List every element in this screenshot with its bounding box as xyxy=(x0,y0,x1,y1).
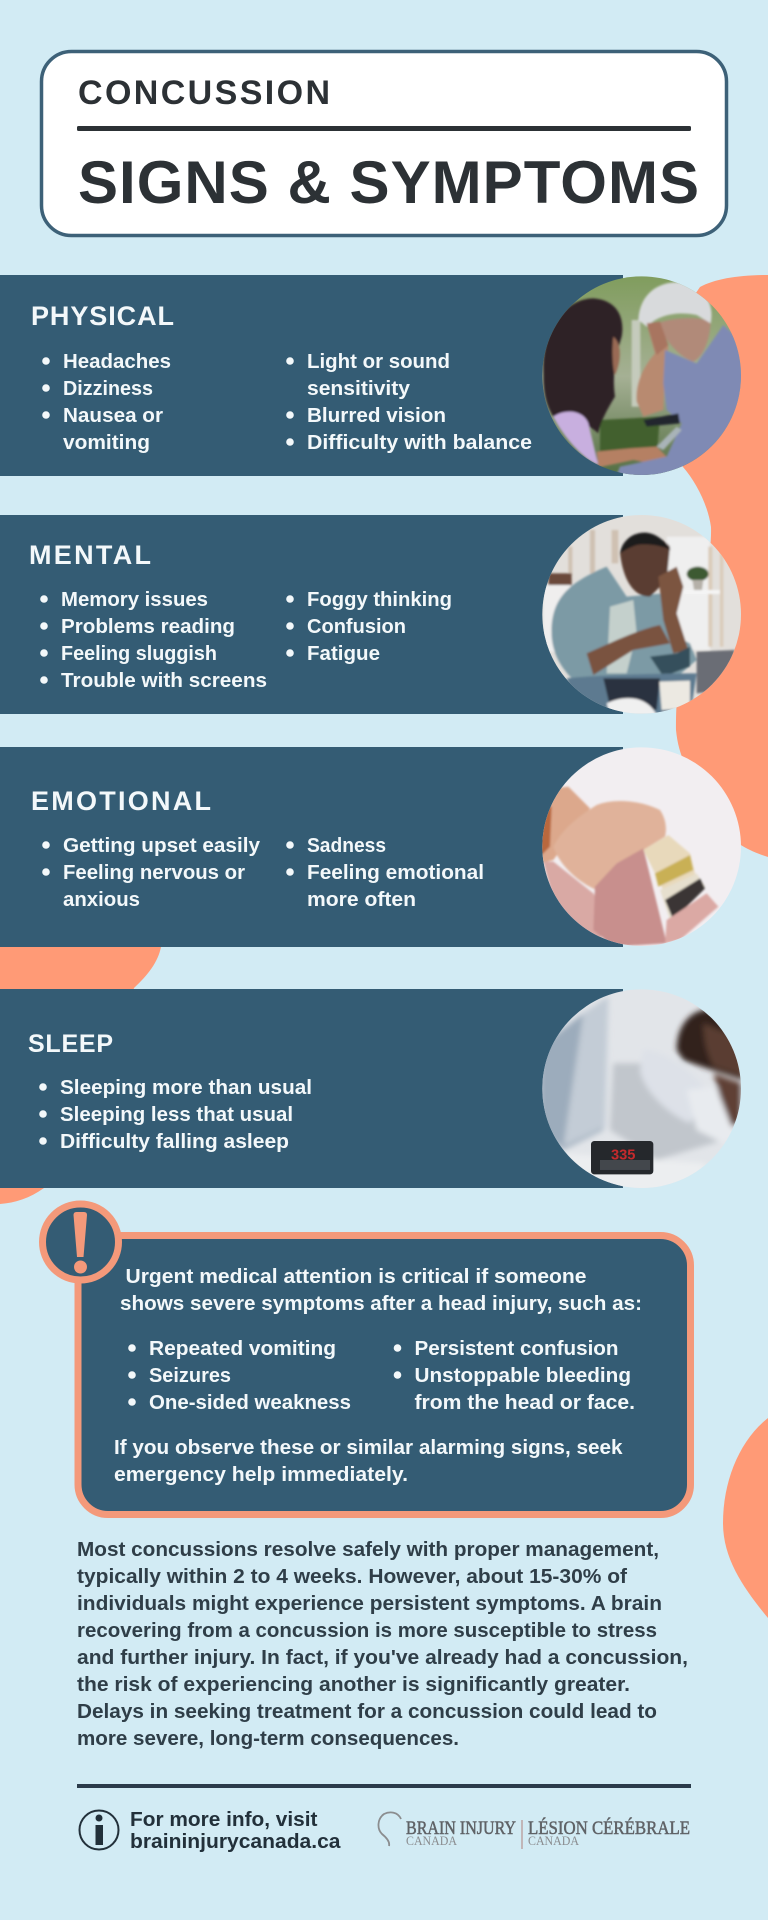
list: physical symptoms: Difficulty with balance xyxy=(307,432,532,454)
list: emotional symptoms: anxious xyxy=(63,889,140,911)
text: recovery paragraph: individuals might experience persistent symptoms. A brain xyxy=(77,1593,662,1615)
logo: english name: CANADA xyxy=(406,1833,458,1848)
list: physical symptoms: Light or sound xyxy=(307,351,450,373)
text: recovery paragraph: more severe, long-term consequences. xyxy=(77,1728,459,1750)
text: urgent intro: shows severe symptoms after a head injury, such as: xyxy=(120,1293,642,1315)
heading: mental: MENTAL xyxy=(29,540,151,570)
photo: woman awake in bed with alarm clock: 335 xyxy=(611,1147,635,1163)
text: recovery paragraph: Most concussions resolve safely with proper management, xyxy=(77,1539,659,1561)
logo: head outline xyxy=(378,1812,401,1846)
list: severe symptoms xyxy=(128,1338,635,1414)
list: mental symptoms: Feeling sluggish xyxy=(61,643,217,665)
decorative orange blob: left xyxy=(0,930,163,1204)
text: seek emergency help xyxy=(114,1437,623,1486)
list: emotional symptoms xyxy=(42,835,484,911)
decorative orange blob: lower right xyxy=(723,1418,768,1618)
list: mental symptoms xyxy=(40,589,452,692)
text: recovery paragraph: Delays in seeking treatment for a concussion could lead to xyxy=(77,1701,657,1723)
panel: emotional xyxy=(0,743,743,950)
logo: french name: LÉSION CÉRÉBRALE xyxy=(528,1817,690,1839)
logo: english name xyxy=(406,1818,516,1848)
list: physical symptoms: Nausea or xyxy=(63,405,163,427)
text: recovery paragraph xyxy=(77,1539,688,1750)
panel: physical xyxy=(0,273,747,483)
list: mental symptoms: Memory issues xyxy=(61,589,208,611)
list: mental symptoms: Problems reading xyxy=(61,616,235,638)
list: emotional symptoms: Getting upset easily xyxy=(63,835,261,857)
list: physical symptoms: Blurred vision xyxy=(307,405,446,427)
list: physical symptoms: sensitivity xyxy=(307,378,411,400)
text: more info link: For more info, visit xyxy=(130,1809,318,1831)
text: recovery paragraph: the risk of experiencing another is significantly greater. xyxy=(77,1674,630,1696)
text: recovery paragraph: and further injury. In fact, if you've already had a concussion, xyxy=(77,1647,688,1669)
heading: physical: PHYSICAL xyxy=(31,301,174,331)
list: severe symptoms: Persistent confusion xyxy=(414,1338,618,1360)
title: signs and symptoms: SIGNS & SYMPTOMS xyxy=(78,149,699,216)
heading: sleep: SLEEP xyxy=(28,1030,113,1058)
title box xyxy=(42,52,726,236)
list: mental symptoms: Foggy thinking xyxy=(307,589,452,611)
list: physical symptoms: Headaches xyxy=(63,351,171,373)
text: more info link: braininjurycanada.ca xyxy=(130,1831,341,1853)
logo: french name xyxy=(528,1817,690,1848)
list: physical symptoms: Dizziness xyxy=(63,378,153,400)
list: emotional symptoms: more often xyxy=(307,889,416,911)
logo: french name: CANADA xyxy=(528,1833,580,1848)
list: physical symptoms xyxy=(42,351,532,454)
text: recovery paragraph: typically within 2 to 4 weeks. However, about 15-30% of xyxy=(77,1566,627,1588)
list: mental symptoms: Confusion xyxy=(307,616,406,638)
list: severe symptoms: Unstoppable bleeding xyxy=(414,1365,631,1387)
list: sleep symptoms: Sleeping more than usual xyxy=(60,1077,312,1099)
list: sleep symptoms: Sleeping less that usual xyxy=(60,1104,293,1126)
panel: mental xyxy=(0,513,743,717)
text: more info link xyxy=(130,1809,341,1853)
list: physical symptoms: vomiting xyxy=(63,432,150,454)
list: mental symptoms: Trouble with screens xyxy=(61,670,267,692)
list: severe symptoms: from the head or face. xyxy=(414,1392,635,1414)
icon: exclamation mark xyxy=(42,1204,118,1280)
text: recovery paragraph: recovering from a concussion is more susceptible to stress xyxy=(77,1620,657,1642)
text: seek emergency help: If you observe these or similar alarming signs, seek xyxy=(114,1437,623,1459)
list: sleep symptoms: Difficulty falling asleep xyxy=(60,1131,289,1153)
icon: info xyxy=(80,1810,118,1850)
heading: emotional: EMOTIONAL xyxy=(31,786,211,816)
logo: Brain Injury Canada xyxy=(378,1812,690,1849)
text: urgent intro: Urgent medical attention is critical if someone xyxy=(126,1266,586,1288)
panel: sleep xyxy=(0,987,743,1193)
title: concussion: CONCUSSION xyxy=(78,74,330,112)
text: urgent intro xyxy=(120,1266,642,1315)
callout: urgent medical attention xyxy=(42,1204,690,1514)
list: severe symptoms: One-sided weakness xyxy=(149,1392,351,1414)
list: severe symptoms: Seizures xyxy=(149,1365,231,1387)
list: sleep symptoms xyxy=(39,1077,312,1153)
list: emotional symptoms: Feeling nervous or xyxy=(63,862,245,884)
list: severe symptoms: Repeated vomiting xyxy=(149,1338,336,1360)
photo: man holding his forehead xyxy=(540,513,743,717)
text: seek emergency help: emergency help immediately. xyxy=(114,1464,408,1486)
photo: woman awake in bed with alarm clock xyxy=(540,987,743,1193)
decorative orange blob: upper right xyxy=(640,275,768,857)
list: mental symptoms: Fatigue xyxy=(307,643,380,665)
photo: hands clasped on shoulder xyxy=(540,743,743,950)
photo: daughter comforting elderly woman xyxy=(540,273,747,483)
list: emotional symptoms: Sadness xyxy=(307,835,386,857)
list: emotional symptoms: Feeling emotional xyxy=(307,862,484,884)
logo: english name: BRAIN INJURY xyxy=(406,1818,516,1839)
